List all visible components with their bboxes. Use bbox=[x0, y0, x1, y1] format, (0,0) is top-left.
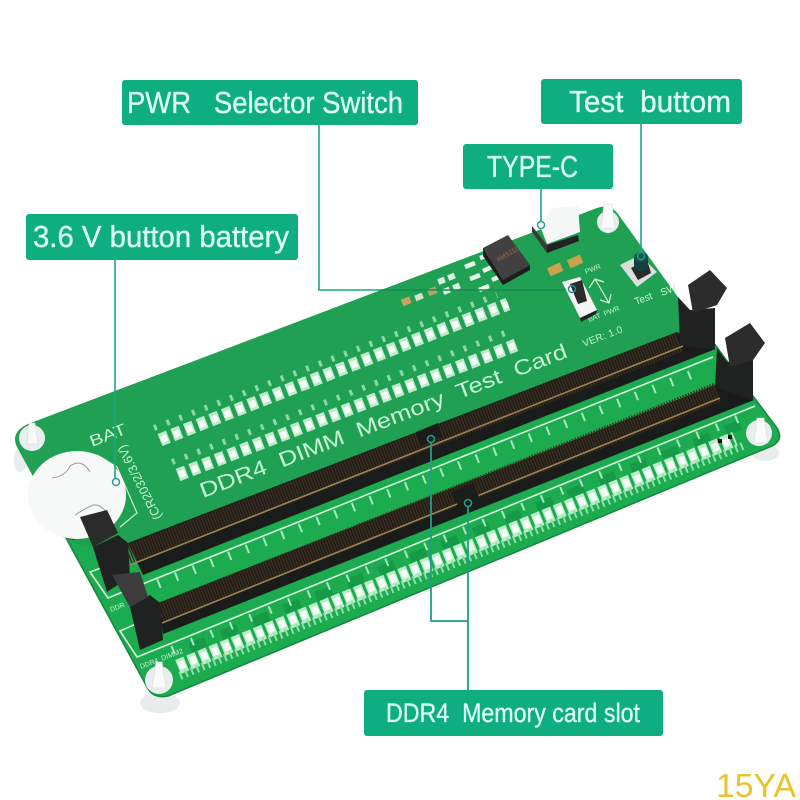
small LED labels bbox=[154, 295, 505, 462]
leader: test button bbox=[638, 124, 644, 260]
Test silkscreen: Test bbox=[633, 291, 654, 308]
BAT silkscreen: BAT bbox=[87, 421, 129, 451]
BAT PWR silkscreen: BAT PWR bbox=[587, 305, 621, 324]
label: TYPE-C bbox=[463, 144, 613, 189]
leader: PWR selector switch bbox=[319, 125, 576, 292]
bottom left standoff bbox=[145, 662, 173, 694]
silkscreen DIMM1 label: DDR bbox=[109, 602, 126, 614]
leader: type-C bbox=[538, 189, 544, 228]
version silkscreen: VER: 1.0 bbox=[581, 324, 625, 350]
dark pad blocks row bbox=[190, 425, 740, 648]
label: PWR Selector Switch: PWR Selector Switch bbox=[127, 85, 403, 120]
memory slot 1 bbox=[128, 332, 713, 575]
slot 2 left latch bbox=[112, 572, 163, 650]
PWR silkscreen: PWR bbox=[584, 263, 602, 276]
test tactile button bbox=[620, 252, 657, 287]
slot 1 left latch bbox=[80, 510, 130, 592]
top left standoff bbox=[19, 423, 45, 451]
power regulator chip bbox=[465, 235, 530, 290]
black test pads at row end bbox=[718, 435, 732, 443]
slot 2 right latch bbox=[715, 323, 765, 400]
battery type silkscreen: (CR2032/3.6V) bbox=[115, 443, 165, 522]
label: DDR4 Memory card slot bbox=[364, 690, 663, 736]
leader: battery bbox=[112, 260, 120, 486]
slot 2 key bbox=[452, 483, 479, 506]
foot shadows under standoffs bbox=[14, 445, 779, 713]
slot 1 right latch bbox=[678, 270, 727, 350]
slot 2 pins bbox=[160, 392, 718, 613]
top right standoff bbox=[597, 204, 619, 233]
leader: memory card slot bbox=[428, 436, 472, 690]
upper board bbox=[15, 204, 680, 560]
chip marking: AMS1117 bbox=[496, 244, 523, 264]
resistors row bbox=[401, 273, 461, 306]
label: DDR4 Memory card slot: DDR4 Memory card slot bbox=[386, 698, 640, 728]
SW silkscreen: SW bbox=[659, 283, 679, 299]
tick labels between slots bbox=[158, 371, 700, 584]
coin battery bbox=[28, 451, 126, 540]
slot 1 gold contact line bbox=[130, 346, 683, 565]
label: Test buttom bbox=[541, 79, 742, 124]
memory slot 2 bbox=[158, 385, 754, 634]
slot 1 pins bbox=[128, 342, 680, 555]
slot 2 gold contact line bbox=[162, 398, 720, 623]
slide switch bbox=[562, 277, 597, 322]
capacitors bbox=[547, 254, 583, 276]
switch direction arrow bbox=[589, 279, 611, 303]
LED row two bbox=[178, 345, 516, 475]
label: TYPE-C: TYPE-C bbox=[487, 149, 578, 184]
label: 3.6 V button battery: 3.6 V button battery bbox=[33, 219, 289, 254]
TYPE-C connector bbox=[532, 206, 580, 253]
label: Test buttom: Test buttom bbox=[569, 84, 731, 119]
slot 1 silkscreen outline bbox=[90, 357, 713, 598]
lower board bbox=[66, 342, 780, 697]
bottom right standoff bbox=[746, 418, 772, 446]
slot 2 silkscreen outline bbox=[120, 406, 755, 657]
tick labels above LED row bbox=[172, 416, 745, 650]
silkscreen DIMM2 label: DDR4_DIMM2 bbox=[139, 648, 184, 671]
title on board: DDR4 DIMM Memory Test Card bbox=[197, 340, 571, 503]
LED row one bbox=[160, 304, 508, 440]
slot 1 key bbox=[416, 423, 442, 446]
LED row lower board bbox=[178, 439, 745, 676]
battery holder outline bbox=[97, 455, 137, 527]
